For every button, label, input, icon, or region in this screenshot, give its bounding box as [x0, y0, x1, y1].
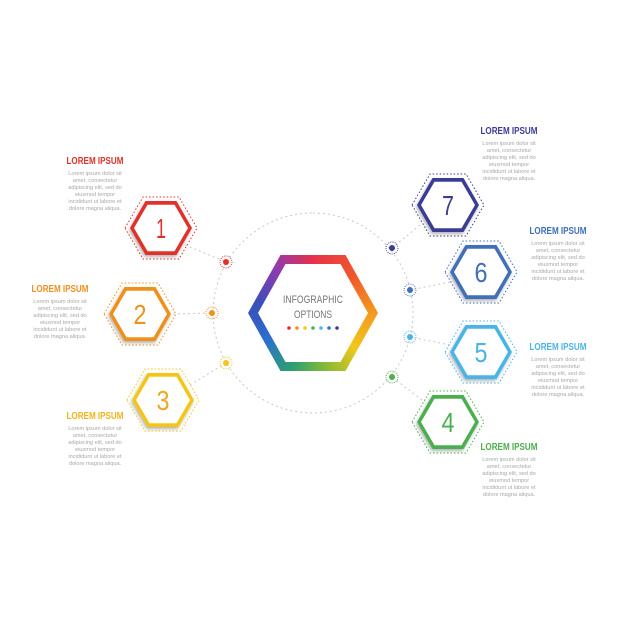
item 3 [127, 369, 199, 431]
item 4 [412, 391, 484, 453]
item 6: 6 [474, 257, 488, 288]
colored dots [287, 326, 339, 330]
item 1 [125, 197, 197, 259]
text: item 7: adipiscing elit, sed do [482, 155, 536, 161]
text: item 6: adipiscing elit, sed do [531, 255, 585, 261]
text: item 7: dolore magna aliqua. [483, 176, 536, 182]
text: item 3: amet, consectetur [73, 433, 117, 439]
text: item 6: Lorem ipsum dolor sit [531, 241, 585, 247]
item 7 [412, 174, 484, 236]
center label: OPTIONS [294, 309, 332, 321]
text: item 2: eiusmod tempor [40, 320, 80, 326]
text: item 4: adipiscing elit, sed do [482, 471, 536, 477]
text: item 1: incididunt ut labore et [68, 199, 122, 205]
text: item 4: Lorem ipsum dolor sit [482, 457, 536, 463]
text: item 1: dolore magna aliqua. [69, 206, 122, 212]
text: item 4 [480, 442, 538, 498]
text: item 7: eiusmod tempor [489, 162, 529, 168]
text: item 3: eiusmod tempor [75, 447, 115, 453]
center label: INFOGRAPHIC [283, 294, 343, 306]
item 4: 4 [442, 407, 454, 438]
text: item 2: incididunt ut labore et [33, 327, 87, 333]
text: item 1: amet, consectetur [73, 178, 117, 184]
text: item 2: amet, consectetur [38, 306, 82, 312]
text: item 3: adipiscing elit, sed do [68, 440, 122, 446]
text: item 3: incididunt ut labore et [68, 454, 122, 460]
text: item 3 [66, 411, 124, 467]
connector dots [206, 242, 416, 383]
text: item 6: dolore magna aliqua. [532, 276, 585, 282]
center label [283, 294, 343, 330]
text: item 4: incididunt ut labore et [482, 485, 536, 491]
text: item 7: LOREM IPSUM [480, 126, 538, 137]
text: item 1 [66, 156, 124, 212]
text: item 5 [530, 342, 586, 398]
text: item 7: amet, consectetur [487, 148, 531, 154]
central hexagon ring [248, 255, 378, 371]
text: item 7 [480, 126, 538, 182]
text: item 4: eiusmod tempor [489, 478, 529, 484]
item 1: 1 [156, 213, 166, 244]
text: item 1: LOREM IPSUM [66, 156, 124, 167]
text: item 2: adipiscing elit, sed do [33, 313, 87, 319]
text: item 5: amet, consectetur [536, 364, 580, 370]
text: item 7: incididunt ut labore et [482, 169, 536, 175]
text: item 6: LOREM IPSUM [530, 226, 586, 237]
item 3: 3 [156, 385, 170, 416]
text: item 2: Lorem ipsum dolor sit [33, 299, 87, 305]
item 6 [445, 241, 517, 303]
text: item 6: eiusmod tempor [538, 262, 578, 268]
text: item 2: dolore magna aliqua. [34, 334, 87, 340]
text: item 3: Lorem ipsum dolor sit [68, 426, 122, 432]
text: item 2 [32, 284, 88, 340]
text: item 6 [530, 226, 586, 282]
text: item 1: eiusmod tempor [75, 192, 115, 198]
text: item 4: LOREM IPSUM [480, 442, 538, 453]
text: item 6: amet, consectetur [536, 248, 580, 254]
text: item 5: eiusmod tempor [538, 378, 578, 384]
text: item 5: incididunt ut labore et [531, 385, 585, 391]
text: item 5: dolore magna aliqua. [532, 392, 585, 398]
text: item 4: dolore magna aliqua. [483, 492, 536, 498]
text: item 1: Lorem ipsum dolor sit [68, 171, 122, 177]
text: item 3: LOREM IPSUM [66, 411, 124, 422]
text: item 7: Lorem ipsum dolor sit [482, 141, 536, 147]
item 2 [104, 283, 176, 345]
text: item 5: adipiscing elit, sed do [531, 371, 585, 377]
item 5 [445, 321, 517, 383]
dashed circle [213, 213, 413, 413]
text: item 1: adipiscing elit, sed do [68, 185, 122, 191]
item 5: 5 [474, 337, 488, 368]
item 7: 7 [442, 190, 454, 221]
text: item 6: incididunt ut labore et [531, 269, 585, 275]
text: item 2: LOREM IPSUM [32, 284, 88, 295]
text: item 4: amet, consectetur [487, 464, 531, 470]
text: item 5: LOREM IPSUM [530, 342, 586, 353]
item 2: 2 [134, 299, 146, 330]
text: item 3: dolore magna aliqua. [69, 461, 122, 467]
text: item 5: Lorem ipsum dolor sit [531, 357, 585, 363]
connectors [173, 225, 450, 400]
